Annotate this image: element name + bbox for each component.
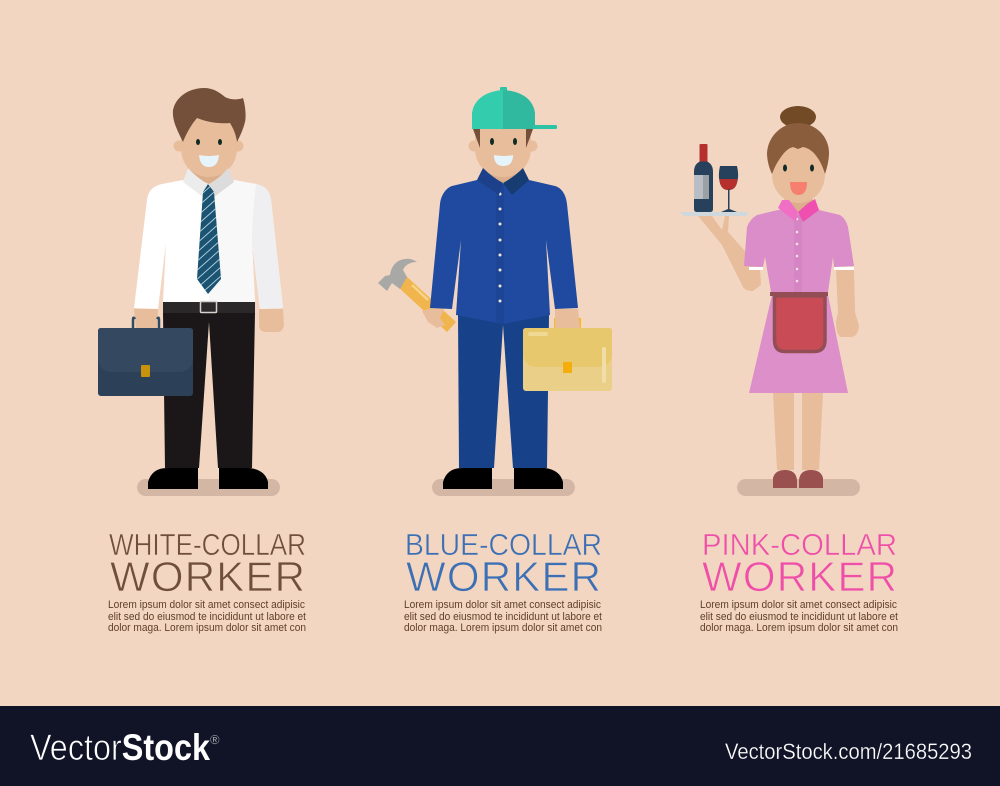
neck xyxy=(187,165,229,184)
figure: pink-collar worker xyxy=(680,106,860,496)
briefcase handle xyxy=(133,318,159,329)
tie xyxy=(197,184,221,294)
collar xyxy=(778,200,798,222)
wine bottle xyxy=(694,144,713,212)
figure: blue-collar worker xyxy=(378,87,612,496)
shirt xyxy=(134,180,283,309)
belt xyxy=(163,302,255,313)
body text: Lorem ipsum dolor sit amet consect adipisic xyxy=(700,599,897,611)
figure: white-collar worker xyxy=(98,88,284,496)
image id: VectorStock.com/21685293 xyxy=(725,739,972,764)
floor shadow xyxy=(737,479,860,496)
blouse xyxy=(744,210,854,292)
body text: Lorem ipsum dolor sit amet consect adipisic xyxy=(108,599,305,611)
shirt xyxy=(430,180,578,324)
floor shadow xyxy=(137,479,280,496)
apron xyxy=(770,292,828,352)
shirt shaded side xyxy=(209,180,259,302)
ears xyxy=(174,140,244,152)
face xyxy=(181,118,237,177)
floor shadow xyxy=(432,479,575,496)
shoes xyxy=(443,468,563,489)
neck xyxy=(482,165,524,184)
eyes xyxy=(783,164,814,172)
hand on briefcase xyxy=(555,309,580,330)
belt buckle xyxy=(200,302,216,312)
blouse buttons xyxy=(796,218,798,282)
side hair xyxy=(473,129,533,148)
trousers xyxy=(163,313,255,468)
shirt shaded sleeve xyxy=(252,184,283,309)
trousers xyxy=(458,315,549,468)
sleeve cuffs xyxy=(749,267,854,270)
neck xyxy=(782,198,815,214)
body text xyxy=(108,599,306,634)
wine glass xyxy=(719,166,738,212)
hand holding hammer xyxy=(422,303,445,328)
collar xyxy=(183,168,208,197)
body text: Lorem ipsum dolor sit amet consect adipisic xyxy=(404,599,601,611)
registered mark: ® xyxy=(210,732,220,747)
logo wordmark: VectorStock xyxy=(30,727,210,768)
legs xyxy=(773,393,823,470)
ears xyxy=(468,140,538,152)
eyes xyxy=(196,139,222,145)
smile xyxy=(494,155,513,166)
body text: elit sed do eiusmod te incididunt ut labore et xyxy=(404,611,602,623)
face xyxy=(772,147,825,203)
shirt placket xyxy=(496,185,504,324)
face xyxy=(475,125,531,177)
lowered arm and hand xyxy=(836,270,859,337)
shirt buttons xyxy=(498,192,502,302)
heading: blue-collar: BLUE-COLLAR xyxy=(405,528,602,562)
hair back xyxy=(767,123,829,174)
body text xyxy=(404,599,602,634)
text block: blue-collar xyxy=(404,528,602,634)
hands xyxy=(134,309,284,332)
body text: dolor maga. Lorem ipsum dolor sit amet con xyxy=(700,622,898,634)
heading: worker: WORKER xyxy=(110,553,305,600)
text block: white-collar xyxy=(108,528,306,634)
blouse placket xyxy=(794,215,802,292)
collar xyxy=(477,168,503,195)
raised arm and hand xyxy=(698,216,761,291)
shoes xyxy=(148,468,268,489)
tray xyxy=(680,212,749,216)
body text: elit sed do eiusmod te incididunt ut labore et xyxy=(108,611,306,623)
briefcase xyxy=(523,309,612,391)
body text: dolor maga. Lorem ipsum dolor sit amet con xyxy=(108,622,306,634)
body text: elit sed do eiusmod te incididunt ut labore et xyxy=(700,611,898,623)
hair bun xyxy=(780,106,816,128)
cap xyxy=(472,87,557,129)
heading: pink-collar: PINK-COLLAR xyxy=(702,528,897,562)
footer bar xyxy=(0,706,1000,786)
eyes xyxy=(490,138,517,145)
smile xyxy=(199,155,219,167)
open mouth xyxy=(790,182,807,195)
briefcase xyxy=(98,328,193,396)
heading: worker: WORKER xyxy=(702,553,897,600)
heading: white-collar: WHITE-COLLAR xyxy=(109,528,306,562)
hammer xyxy=(378,259,456,332)
body text xyxy=(700,599,898,634)
hair xyxy=(173,88,246,142)
shoes xyxy=(773,470,823,488)
skirt xyxy=(749,295,848,393)
heading: worker: WORKER xyxy=(406,553,601,600)
text block: pink-collar xyxy=(700,528,898,634)
body text: dolor maga. Lorem ipsum dolor sit amet con xyxy=(404,622,602,634)
